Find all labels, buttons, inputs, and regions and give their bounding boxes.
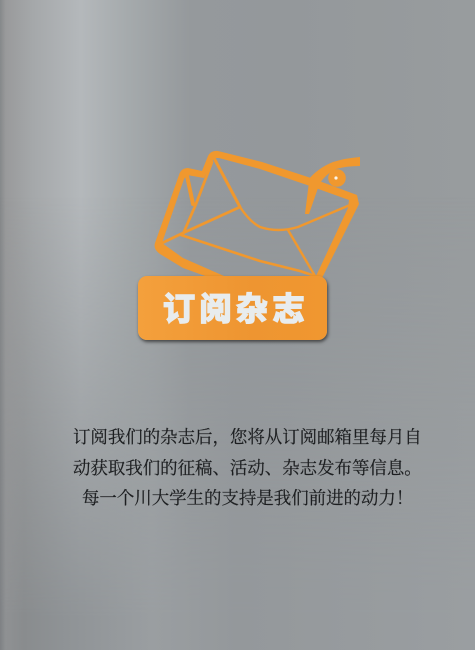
envelope outer outline [155,151,359,278]
bird beak [305,182,318,214]
text line 3: 每一个川大学生的支持是我们前进的动力！ [82,488,413,508]
bird head line [308,157,360,183]
envelope flap and folds [160,158,350,277]
bird eye [328,169,346,187]
text line 2: 动获取我们的征稿、活动、杂志发布等信息。 [73,458,422,478]
bird eye highlight [334,176,338,180]
orange subscribe button [138,276,327,340]
button label: 订阅杂志 [163,291,309,327]
background: brushed metal gradient [0,0,150,650]
text line 1: 订阅我们的杂志后，您将从订阅邮箱里每月自 [73,427,422,447]
